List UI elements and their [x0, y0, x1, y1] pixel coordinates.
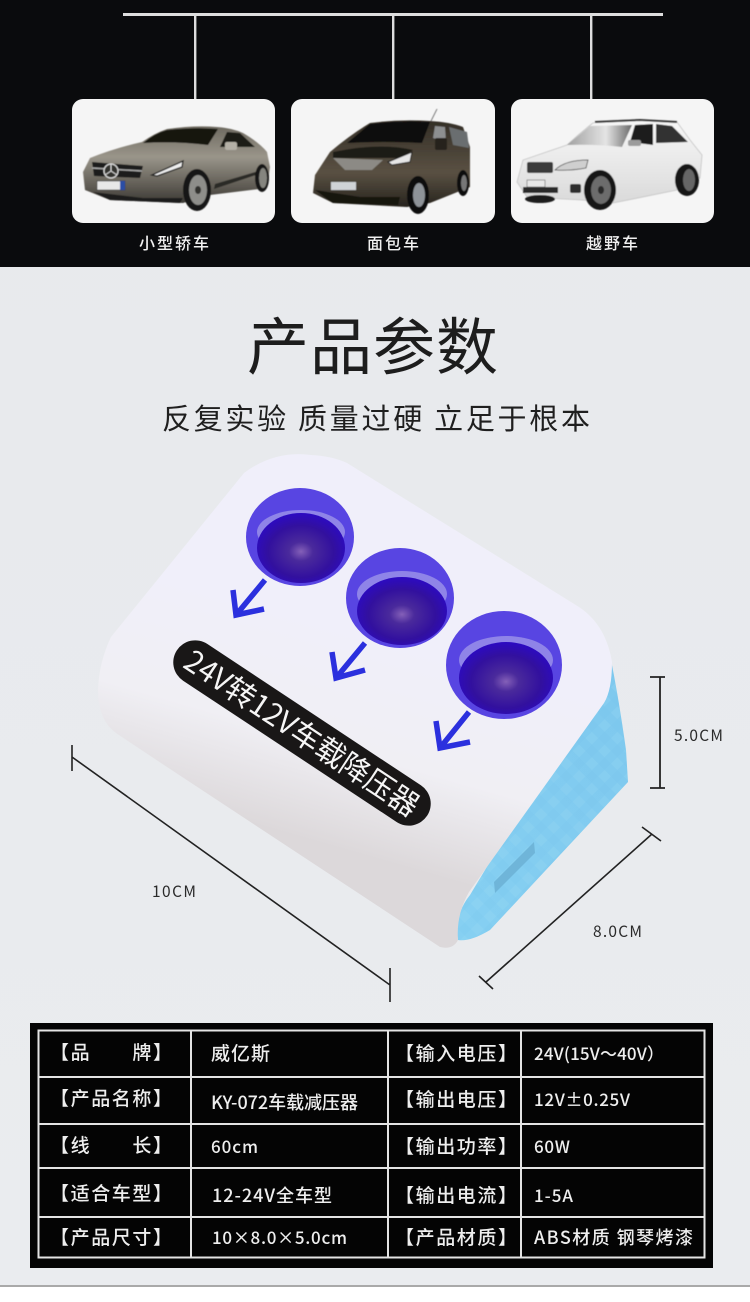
device top face: [98, 454, 612, 948]
blue side panel: [457, 660, 628, 940]
label: SUV: 越野车: [586, 230, 638, 254]
row: cable length: 【输出功率】: [395, 1132, 517, 1159]
row: product name: 【输出电压】: [395, 1085, 517, 1112]
dimension: height 5.0CM: [650, 677, 723, 788]
row: size and material: 【产品尺寸】: [50, 1223, 172, 1250]
label: sedan: 小型轿车: [139, 230, 209, 254]
panel: specification table: [30, 1023, 713, 1268]
socket 2: [346, 548, 454, 648]
title: 产品参数: [247, 297, 498, 387]
row: product name: [50, 1084, 631, 1115]
row: cable length: 【线 长】: [50, 1131, 172, 1158]
panel: compatible vehicles: [0, 0, 750, 267]
dimension: width 8.0CM: 8.0CM: [593, 920, 642, 942]
row: brand: 【输入电压】: [395, 1039, 517, 1066]
row: compatible vehicles: [50, 1179, 573, 1208]
label pill: 24V转12V车载降压器: [177, 637, 429, 825]
dimension: width 8.0CM: [479, 827, 661, 989]
row: product name: KY-072车载减压器: [211, 1089, 358, 1115]
arrow 1: [233, 580, 265, 615]
row: cable length: 60W: [534, 1133, 570, 1158]
connector lines: [123, 13, 663, 100]
arrow 2: [332, 643, 365, 678]
row: brand: [50, 1038, 664, 1066]
arrow 3: [436, 712, 470, 748]
card: SUV: [511, 99, 714, 223]
row: product name: 【产品名称】: [50, 1084, 172, 1111]
row: compatible vehicles: 12-24V全车型: [212, 1182, 332, 1208]
side slot: [494, 842, 535, 893]
row: size and material: ABS材质 钢琴烤漆: [534, 1224, 693, 1250]
row: product name: 12V±0.25V: [534, 1086, 631, 1111]
socket 3: [446, 611, 562, 719]
page bottom edge: [0, 1285, 750, 1287]
card: van: [291, 99, 495, 223]
row: compatible vehicles: 【适合车型】: [50, 1179, 172, 1206]
row: cable length: 60cm: [211, 1133, 258, 1158]
socket 1: [246, 488, 354, 586]
row: size and material: 【产品材质】: [395, 1223, 517, 1250]
row: compatible vehicles: 【输出电流】: [395, 1181, 517, 1208]
dimension: length 10CM: 10CM: [152, 880, 196, 902]
dimension: length 10CM: [72, 745, 390, 1002]
row: brand: 【品 牌】: [50, 1038, 172, 1065]
subtitle: 反复实验 质量过硬 立足于根本: [162, 396, 590, 438]
dimension: height 5.0CM: 5.0CM: [674, 724, 723, 746]
row: size and material: 10×8.0×5.0cm: [212, 1224, 347, 1249]
row: brand: 威亿斯: [211, 1039, 270, 1066]
product illustration: car voltage reducer: [98, 454, 628, 948]
label: van: 面包车: [367, 230, 419, 254]
row: brand: 24V(15V～40V）: [534, 1040, 664, 1065]
row: cable length: [50, 1131, 570, 1159]
card: sedan: [72, 99, 275, 223]
row: size and material: [50, 1223, 693, 1250]
row: compatible vehicles: 1-5A: [534, 1182, 573, 1207]
